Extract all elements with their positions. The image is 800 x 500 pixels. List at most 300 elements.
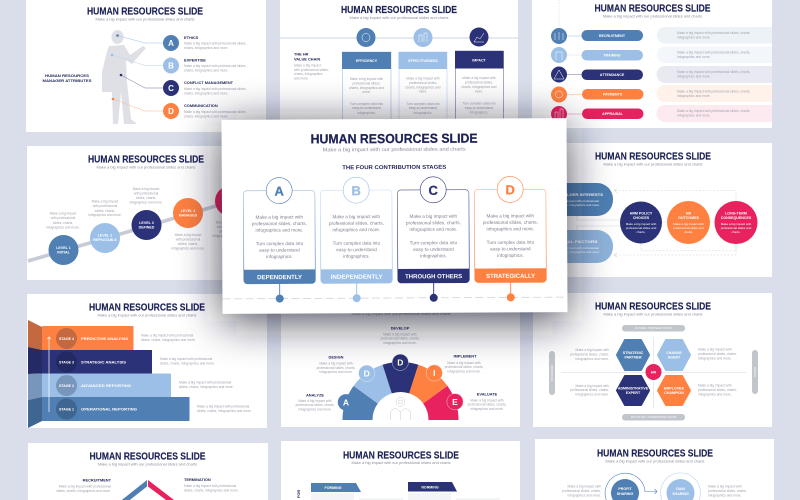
card A: dependently: DEPENDENTLY (257, 275, 302, 281)
attribute badges A to D: A (168, 39, 174, 48)
quadrant descriptions: infographics and more. (698, 392, 732, 396)
row: appraisal (551, 105, 772, 122)
quadrant descriptions: infographics and more. (575, 392, 609, 396)
badges: A D D I E: E (452, 397, 458, 407)
circle: HR policy choices: Make a big impact with (626, 222, 657, 226)
level 5: infographics and more. (212, 234, 246, 238)
card A: dependently: A (274, 184, 285, 199)
attribute descriptions: EXPERTISE (184, 58, 206, 62)
attribute badges A to D: B (168, 62, 174, 70)
pill: stakeholder interests (532, 183, 613, 216)
attribute descriptions (184, 35, 247, 118)
panel: HR functions list slide (532, 0, 772, 128)
card D: strategically: infographics and more. (487, 226, 534, 232)
column: effectiveness: Turn complex data into (406, 102, 440, 106)
text: value chain intro: Make a big impact (294, 64, 321, 68)
card C: through others: C (428, 183, 439, 198)
attribute descriptions: CONFLICT MANAGEMENT (184, 80, 234, 85)
column: effectiveness: easy-to-understand (409, 106, 437, 110)
text: stage descriptions: DESIGN (329, 354, 344, 360)
circle: HR outcomes: charts. (684, 230, 693, 234)
card D: strategically: STRATEGICALLY (486, 274, 535, 280)
circle: HR policy choices: charts. (636, 230, 646, 234)
icon: person with gear (390, 398, 410, 420)
stage 4 bar: STAGE 4 (59, 337, 74, 341)
text: stage descriptions: infographics and more. (298, 408, 332, 412)
column: effectiveness: Make a big impact with (406, 76, 440, 80)
text: recruitment: slides, charts, infographics and more. (56, 489, 111, 493)
column: impact: easy-to-understand (465, 106, 493, 110)
subtitle: ADDIE slide: Make a big impact with our professional slides and charts (352, 312, 451, 316)
level 1: with professional (51, 216, 76, 220)
text: stage descriptions: Make a big impact with (470, 398, 504, 402)
level 4 (171, 198, 205, 250)
row: payments: Make a big impact with professional slides, charts, (677, 90, 750, 94)
row: payments: PAYMENTS (603, 92, 623, 96)
text: stage descriptions: infographics and more. (319, 370, 353, 374)
column: impact: Make a big impact with (462, 76, 496, 80)
hexagon: strategic partner: STRATEGIC (623, 351, 644, 355)
row: recruitment: infographics and more. (677, 36, 711, 40)
chevron: lifecycle shape (122, 480, 174, 500)
level 4: Make a big impact (175, 233, 201, 237)
level 2: infographics and more. (88, 213, 122, 217)
card C: through others: infographics. (420, 253, 447, 258)
attribute badges A to D (163, 35, 179, 119)
text: stage descriptions: infographics and more. (470, 407, 504, 411)
panel: manager attributes slide (26, 0, 266, 132)
column: efficiency (342, 52, 391, 122)
quadrant axes (561, 337, 746, 408)
heading: knowledge slide: HUMAN RESOURCES SLIDE (597, 448, 713, 460)
text: stage descriptions: professional slides, charts, (296, 403, 335, 407)
text: recruitment: RECRUITMENT (83, 478, 112, 482)
value chain timeline (280, 37, 518, 39)
arrow: stage progression (47, 337, 51, 412)
circle: profit sharing: PROFIT (618, 487, 632, 491)
side descriptions: professional slides, charts, (562, 489, 601, 493)
row: attendance: Make a big impact with professional slides, charts, (677, 70, 750, 74)
heading: stages slide: HUMAN RESOURCES SLIDE (89, 302, 205, 314)
circle: HR outcomes (667, 201, 710, 244)
text: stage descriptions (296, 326, 507, 412)
row: training: Make a big impact with professional slides, charts, (677, 50, 750, 54)
stage 4 bar: Make a big impact with professional (141, 334, 193, 338)
text: stage descriptions: ANALYZE (306, 392, 324, 398)
badges: A D D I E: D (364, 368, 370, 378)
side descriptions: Make a big impact with (567, 484, 601, 488)
subtitle: maturity slide: Make a big impact with our professional slides and charts (96, 166, 196, 170)
circle: profit sharing (605, 473, 645, 500)
circle: HR policy choices (620, 202, 662, 244)
row: attendance (551, 66, 772, 83)
card A: dependently (243, 177, 315, 303)
circle: long term consequences: CONSEQUENCES (721, 216, 752, 220)
column: efficiency: infographics. (357, 111, 376, 115)
text: termination (184, 477, 239, 492)
panel: HR value chain slide (280, 0, 518, 122)
subtitle: Make a big impact with our professional slides and charts (323, 147, 466, 153)
level 2 (88, 200, 122, 253)
text: manager attributes label (42, 73, 92, 83)
column: efficiency: more. (362, 90, 371, 94)
text: stage descriptions: IMPLEMENT (454, 354, 477, 358)
badges: A D D I E: A (343, 397, 349, 407)
text: manager attributes label: MANAGER ATTRIBUTES (42, 78, 92, 83)
text: stage descriptions: EVALUATE (477, 392, 498, 396)
stage 3 bar: STAGE 3 (59, 360, 74, 364)
circle: long term consequences (714, 201, 758, 244)
card B: independently (320, 177, 392, 302)
text: value chain intro: THE HR (294, 52, 309, 56)
panel: HR roles quadrant slide: PEOPLE (753, 367, 757, 377)
attribute descriptions: charts, infographics and more. (184, 46, 228, 50)
quadrant descriptions: professional slides, charts, (570, 352, 609, 356)
badges: A D D I E: D (397, 357, 403, 367)
level 3: slides, charts, (136, 196, 156, 200)
heading: quadrant slide: HUMAN RESOURCES SLIDE (595, 302, 711, 312)
row: recruitment: RECRUITMENT (599, 34, 626, 38)
attribute descriptions: Make a big impact with professional slides, (184, 42, 247, 46)
column: impact: infographics. (470, 110, 488, 114)
card D: strategically (474, 176, 546, 302)
text: stage descriptions: professional slides, charts, (317, 366, 356, 370)
attribute descriptions: charts, infographics and more. (184, 92, 228, 96)
text: stage descriptions: professional slides, charts, (381, 336, 420, 340)
column: impact: IMPACT (472, 58, 487, 62)
card D: strategically: infographics. (497, 253, 524, 258)
heading: policy slide: HUMAN RESOURCES SLIDE (595, 152, 711, 162)
quadrant descriptions (570, 348, 737, 396)
text: recruitment (56, 478, 112, 493)
heading: maturity slide: HUMAN RESOURCES SLIDE (88, 154, 204, 166)
hexagon: employee champion (658, 376, 690, 405)
circle: HR policy choices: CHOICES (633, 216, 650, 220)
circle: HR outcomes: Make a big impact with (673, 222, 704, 226)
panel: team stages slide (281, 441, 520, 500)
quadrant descriptions: infographics and more. (575, 357, 609, 361)
stage 2 bar: Make a big impact with professional (179, 380, 231, 384)
row: appraisal: APPRAISAL (602, 112, 624, 116)
subtitle: knowledge slide: Make a big impact with our professional slides and charts (606, 460, 705, 464)
featured slide shadow (222, 126, 567, 321)
hexagon: employee champion: CHAMPION (664, 391, 684, 395)
row: recruitment: Make a big impact with professional slides, charts, (677, 31, 750, 35)
card C: through others: easy-to-understand (413, 247, 454, 252)
level 3: infographics and more. (129, 200, 163, 204)
attribute descriptions: charts, infographics and more. (184, 68, 228, 72)
level 2: LEVEL 2 (98, 234, 112, 238)
pill: stakeholder interests: Make a big impact with professional (551, 199, 599, 203)
row: training: TRAINING (603, 54, 621, 58)
text: stage descriptions: infographics and more. (383, 341, 417, 345)
subtitle: lifecycle slide: Make a big impact with our professional slides and charts (98, 462, 197, 466)
pill: situational factors (532, 230, 613, 263)
title: HUMAN RESOURCES SLIDE (311, 131, 478, 146)
subtitle: policy slide: Make a big impact with our professional slides and charts (604, 162, 703, 166)
level 1: infographics and more. (46, 226, 80, 230)
card B: independently: B (351, 183, 361, 198)
card A: dependently: easy-to-understand (259, 247, 300, 253)
card A: dependently: Turn complex data into (256, 241, 304, 246)
column: effectiveness: more. (419, 90, 427, 94)
card B: independently: professional slides, charts, (329, 221, 384, 226)
heading: value chain slide: HUMAN RESOURCES SLIDE (341, 5, 457, 16)
card D: strategically: easy-to-understand (490, 246, 531, 251)
card C: through others: infographics and more. (410, 227, 457, 232)
heading: team stages slide: HUMAN RESOURCES SLIDE (343, 450, 459, 462)
stage 2 bar: slides, charts, infographics and more. (179, 385, 234, 389)
badges: A D D I E: I (433, 368, 435, 378)
card C: through others: Make a big impact with (409, 214, 458, 219)
pill: situational factors: SITUATIONAL FACTORS (542, 240, 598, 244)
attribute descriptions: ETHICS (184, 35, 199, 40)
level 3: Make a big impact (133, 187, 159, 191)
text: termination: slides, charts, infographics and more. (184, 488, 239, 492)
circle: HR policy choices: professional slides and (626, 226, 657, 230)
card D: strategically: Make a big impact with (486, 213, 535, 219)
row: training (551, 46, 772, 63)
card C: through others (397, 177, 469, 302)
card B: independently: Turn complex data into (333, 241, 381, 246)
hexagon: administrative expert: EXPERT (626, 391, 641, 395)
attribute descriptions: COMMUNICATION (184, 103, 218, 108)
panel: knowledge circles slide (535, 439, 774, 500)
card A: dependently: infographics and more. (256, 227, 303, 233)
level 2: slides, charts, (95, 209, 115, 213)
text: stage descriptions: Make a big impact with (319, 362, 353, 366)
stage 1 bar: OPERATIONAL REPORTING (81, 408, 137, 412)
timeline dashed line (222, 297, 567, 299)
level 4: LEVEL 4 (181, 209, 195, 213)
hexagon: strategic partner: PARTNER (624, 356, 642, 360)
text: stage descriptions: Make a big impact with (298, 399, 332, 403)
text: value chain intro: charts, infographics (294, 72, 323, 76)
text: vertical label: FOR (296, 490, 301, 498)
pill: stakeholder interests: slides, charts, infographics and more. (550, 203, 600, 207)
subtitle: value chain slide: Make a big impact with our professional slides and charts (350, 16, 449, 20)
maturity progression line (28, 199, 240, 261)
card B: independently: INDEPENDENTLY (331, 275, 383, 281)
panel: policy outcomes slide (532, 143, 772, 277)
quadrant descriptions: Make a big impact with (575, 348, 609, 352)
level 4: slides, charts, (178, 242, 198, 246)
subtitle: team stages slide: Make a big impact with our professional slides and charts (352, 461, 451, 465)
hexagon: change agent (658, 340, 690, 370)
text: value chain intro: and more. (294, 76, 309, 80)
panel: ADDIE semicircle slide (281, 200, 520, 427)
attribute descriptions: Make a big impact with professional slides, (184, 64, 247, 68)
level 1: INITIAL (57, 250, 71, 254)
stage 4 bar (28, 320, 196, 350)
hexagon: change agent: CHANGE (666, 351, 682, 355)
stage text boxes (311, 493, 500, 500)
heading: manager attributes slide: HUMAN RESOURCES SLIDE (87, 6, 203, 18)
text: termination: TERMINATION (184, 477, 211, 482)
heading: lifecycle slide: HUMAN RESOURCES SLIDE (90, 452, 206, 462)
badge: HR: HR (651, 370, 656, 374)
quadrant descriptions: infographics and more. (698, 356, 732, 360)
circle: HR outcomes: OUTCOMES (678, 216, 699, 220)
level 5 (212, 186, 246, 238)
level 3: with professional (134, 192, 159, 196)
level 1 (46, 212, 80, 265)
circle: profit sharing: SHARING (617, 492, 633, 496)
row: appraisal: infographics and more. (677, 114, 711, 118)
stage 3 bar: slides, charts, infographics and more. (160, 362, 215, 366)
stage 1 bar (28, 397, 252, 428)
row: appraisal: Make a big impact with professional slides, charts, (677, 109, 750, 113)
level 4: MANAGED (179, 214, 198, 218)
circle: gain sharing: SHARING (672, 492, 689, 496)
tab: norming: NORMING (421, 486, 439, 490)
attribute badges A to D: D (168, 107, 174, 116)
stage 2 bar (28, 374, 234, 400)
badge: HR (646, 364, 662, 380)
tab: norming (408, 482, 457, 492)
stage 3 bar (28, 347, 215, 374)
side descriptions: professional slides, charts, (708, 489, 747, 493)
text: recruitment: Make a big impact with professional (59, 484, 111, 488)
level 3 (129, 187, 163, 240)
column: impact: charts, infographics and (461, 85, 497, 89)
stage 4 bar: slides, charts, infographics and more. (141, 338, 196, 342)
circle: long term consequences: charts. (731, 230, 741, 234)
card B: independently: easy-to-understand (336, 247, 377, 252)
text: stage descriptions: Make a big impact with (383, 332, 417, 336)
circle: long term consequences: Make a big impact with (721, 222, 752, 226)
card A: dependently: infographics. (266, 254, 293, 259)
text: stage descriptions: infographics and more. (447, 370, 481, 374)
attribute descriptions: Make a big impact with professional slides, (184, 110, 247, 114)
level 1: slides, charts, (53, 221, 73, 225)
level 1: Make a big impact (50, 212, 76, 216)
row: payments (551, 85, 772, 102)
circle: long term consequences: LONG-TERM (725, 212, 747, 216)
stage 1 bar: slides, charts, infographics and more. (197, 409, 252, 413)
circle: gain sharing (660, 473, 700, 500)
row: training: infographics and more. (677, 55, 711, 59)
quadrant descriptions: Make a big impact with (698, 348, 732, 352)
column: impact: Turn complex data into (462, 102, 496, 106)
level 1: LEVEL 1 (56, 246, 71, 250)
stage 1 bar: Make a big impact with professional (197, 404, 249, 408)
level 4: with professional (176, 238, 201, 242)
card D: strategically: D (505, 182, 515, 197)
panel: HR roles quadrant slide: PROCESSES (550, 365, 554, 381)
level 2: REPEATABLE (93, 238, 118, 242)
panel: maturity levels slide (27, 146, 267, 280)
row: attendance: infographics and more. (677, 74, 711, 78)
column: effectiveness: charts, infographics and (405, 86, 441, 90)
pill: stakeholder interests: STAKEHOLDER INTERESTS (547, 193, 604, 197)
heading: functions slide: HUMAN RESOURCES SLIDE (594, 4, 711, 14)
text: manager attributes label: HUMAN RESOURCES (45, 73, 89, 78)
stage 1 bar: STAGE 1 (59, 408, 74, 412)
panel: analytics stages slide (27, 294, 267, 428)
row: recruitment (551, 27, 772, 44)
stage 2 bar: STAGE 2 (59, 384, 74, 388)
hexagon: change agent: AGENT (668, 356, 681, 360)
side descriptions: infographics and more. (708, 494, 742, 498)
subtitle: quadrant slide: Make a big impact with our professional slides and charts (604, 312, 703, 316)
hexagon: strategic partner (617, 340, 649, 370)
card C: through others: Turn complex data into (410, 240, 458, 245)
stage 3 bar: STRATEGIC ANALYSIS (81, 360, 127, 364)
chart: ADDIE semicircle segments (342, 362, 458, 420)
panel: HR roles quadrant slide: DAY-TO-DAY / OPERATIONAL FOCUS (631, 415, 676, 419)
stage 4 bar: PREDICTIVE ANALYSIS (81, 337, 129, 341)
axis labels (549, 325, 758, 420)
pill: situational factors: Make a big impact with professional (551, 246, 599, 250)
icons: value chain circles (356, 28, 488, 47)
attribute badges A to D: C (168, 84, 174, 93)
attribute connector lines (112, 36, 165, 111)
level 2: Make a big impact (92, 200, 118, 204)
column: efficiency: EFFICIENCY (356, 59, 378, 63)
circle: HR outcomes: professional slides and (673, 226, 704, 230)
column: effectiveness: infographics. (414, 111, 432, 115)
text: value chain intro: VALUE CHAIN (294, 56, 320, 62)
level 5: LEVEL 5 (223, 201, 237, 205)
circle: HR policy choices: HRM POLICY (630, 212, 653, 216)
quadrant descriptions: Make a big impact with (698, 384, 732, 388)
level 3: LEVEL 3 (139, 221, 154, 225)
subtitle: manager attributes slide: Make a big impact with our professional slides and charts (96, 18, 195, 22)
row: attendance: ATTENDANCE (600, 73, 625, 77)
text: termination: Make a big impact with professional (184, 484, 236, 488)
column: impact: professional slides, (465, 80, 493, 84)
attribute descriptions: Make a big impact with professional slides, (184, 87, 247, 91)
quadrant descriptions: professional slides, charts, (570, 388, 609, 392)
card B: independently: infographics. (343, 254, 370, 259)
column: efficiency: Turn complex data into (350, 102, 383, 106)
level 5: Make a big impact (216, 220, 242, 224)
column: efficiency: professional slides, (352, 82, 381, 86)
card D: strategically: Turn complex data into (487, 240, 535, 245)
level 2: with professional (93, 204, 118, 208)
level 4: infographics and more. (171, 246, 205, 250)
side descriptions: infographics and more. (567, 494, 601, 498)
card B: independently: Make a big impact with (332, 214, 381, 219)
section heading: THE FOUR CONTRIBUTION STAGES (342, 165, 447, 171)
circle: gain sharing: GAIN (676, 487, 685, 491)
card B: independently: infographics and more. (333, 227, 380, 232)
panel: employee lifecycle slide (28, 443, 268, 500)
hexagon: administrative expert: ADMINISTRATIVE (618, 386, 649, 390)
panel: HR roles quadrant slide (533, 293, 772, 427)
hexagon: employee champion: EMPLOYEE (664, 386, 685, 390)
side descriptions: Make a big impact with (708, 484, 742, 488)
card C: through others: THROUGH OTHERS (405, 274, 462, 280)
card A: dependently: professional slides, charts, (252, 221, 307, 226)
card D: strategically: professional slides, charts, (483, 220, 538, 225)
badges: A D D I E (338, 354, 463, 410)
column: impact (455, 51, 504, 121)
tab: forming: FORMING (325, 486, 342, 490)
quadrant descriptions: professional slides, charts, (698, 352, 737, 356)
card A: dependently: Make a big impact with (255, 214, 304, 220)
text: stage descriptions: professional slides, charts, (468, 402, 507, 406)
column: efficiency: Make a big impact with (350, 77, 383, 81)
quadrant descriptions: professional slides, charts, (698, 388, 737, 392)
card C: through others: professional slides, charts, (406, 220, 461, 225)
text: stage descriptions: DEVELOP (391, 326, 410, 330)
column: impact: more. (475, 90, 483, 94)
hexagon: administrative expert (617, 376, 649, 405)
circle: long term consequences: professional slides and (721, 226, 752, 230)
level 5: slides, charts, (219, 230, 239, 234)
